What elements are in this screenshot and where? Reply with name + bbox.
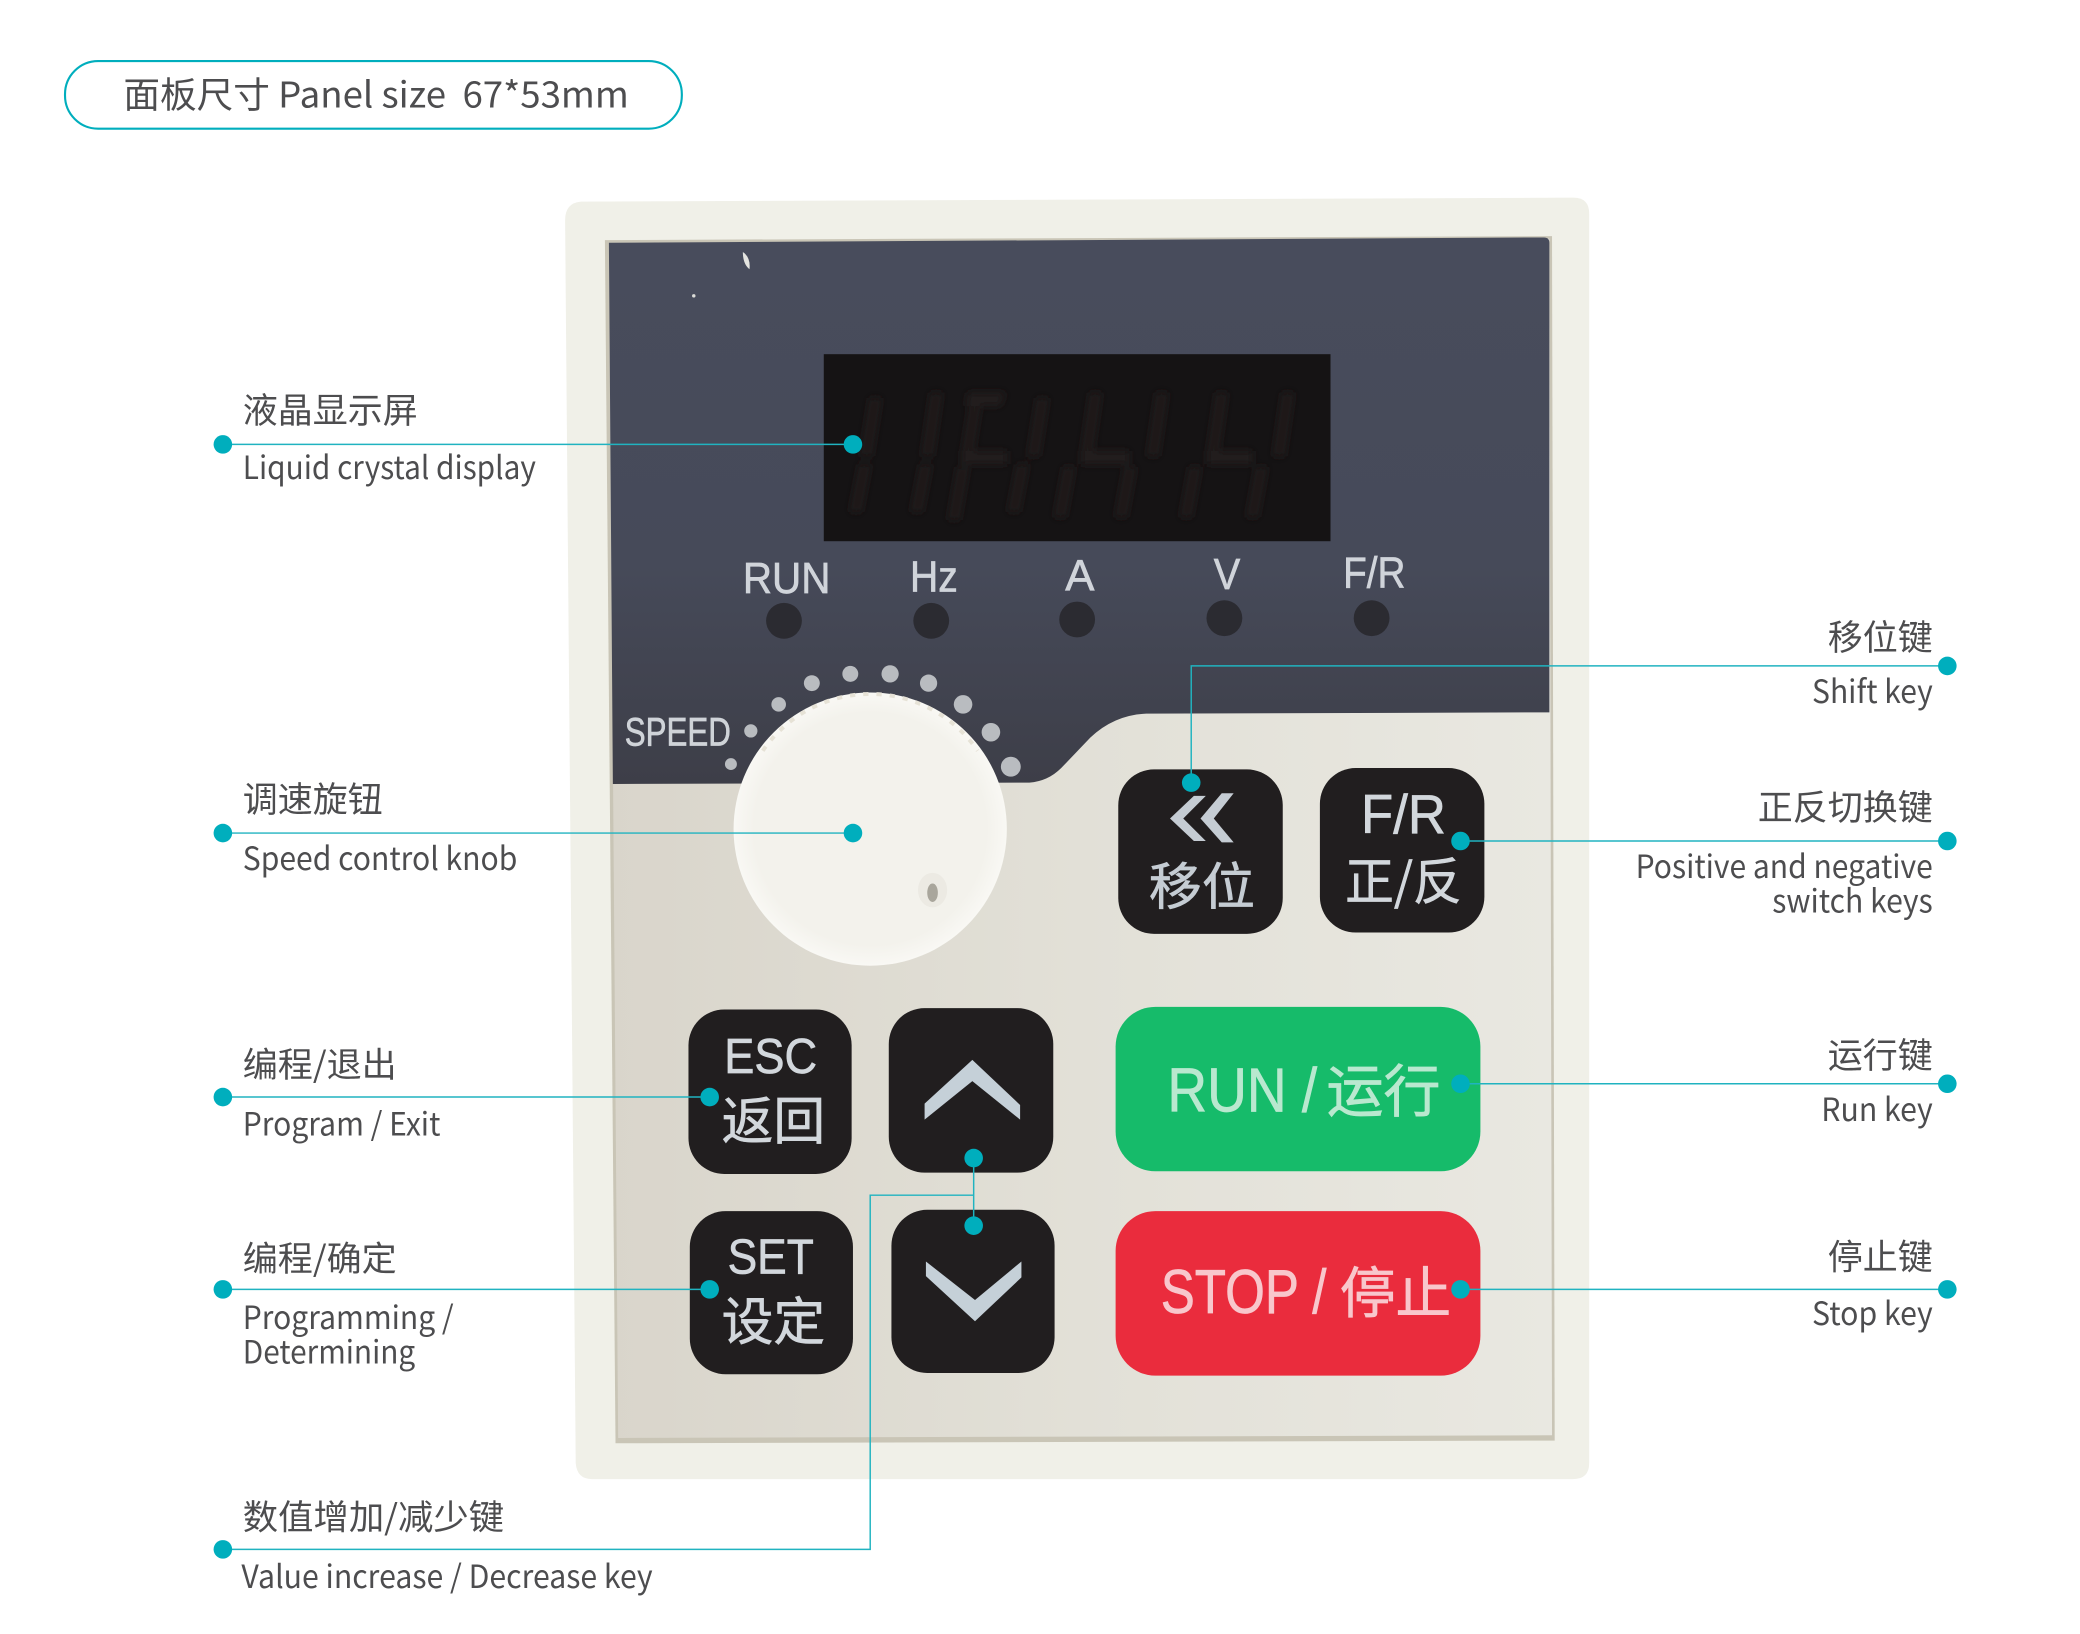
callout: speed control knob: 调速旋钮 [243,772,383,823]
key: STOP [1116,1211,1480,1376]
indicator LEDs [766,600,1390,639]
callout: liquid crystal display: 液晶显示屏 [243,383,418,434]
key: RUN [1116,1007,1480,1171]
callout: shift key [1182,610,1957,792]
callout: liquid crystal display: Liquid crystal display [243,443,536,489]
callout: speed control knob: Speed control knob [243,834,517,880]
key: ESC: ESC [724,1030,817,1084]
inner panel recess [605,236,1555,1443]
callout: shift key: 移位键 [1828,610,1933,661]
key: STOP: STOP / [1161,1258,1327,1327]
callout: programming determining: Determining [243,1328,415,1374]
key: RUN: RUN / [1167,1057,1318,1126]
outer plastic case [565,198,1589,1479]
callout: shift key: Shift key [1812,667,1933,713]
title pill [65,61,682,129]
speed scale dots [725,665,1021,777]
LED display window [824,354,1331,541]
title pill: 面板尺寸 Panel size 67*53mm [123,66,629,118]
callout: positive negative switch [1451,780,1957,923]
key: F/R [1320,768,1484,933]
dark display area [609,237,1549,784]
callout: run key: Run key [1821,1085,1933,1131]
callout: run key: 运行键 [1828,1028,1933,1079]
callout: positive negative switch: Positive and negative [1636,842,1933,888]
callout: value increase decrease: 数值增加/减少键 [243,1489,504,1539]
key: shift: 移位 [1149,847,1255,920]
callout: stop key [1451,1229,1957,1335]
key: ESC [688,1009,852,1174]
callout: positive negative switch: 正反切换键 [1758,780,1933,831]
panel light surface [609,239,1552,1438]
key: up [889,1008,1053,1173]
key: RUN: 运行 [1327,1047,1441,1129]
callout: stop key: 停止键 [1828,1229,1933,1280]
callout: speed control knob [214,772,862,880]
callout: program exit: Program / Exit [243,1099,440,1145]
callout: positive negative switch: switch keys [1772,877,1933,923]
key: SET [690,1211,853,1374]
callout: programming determining: 编程/确定 [243,1231,397,1281]
indicator labels [743,549,1405,603]
key: shift [1118,769,1283,934]
callout: program exit: 编程/退出 [243,1037,397,1087]
key: ESC: 返回 [722,1079,825,1154]
speed knob [734,692,1007,966]
callout: value increase decrease [214,1149,983,1598]
indicator labels: Hz [910,553,958,602]
callout: liquid crystal display [214,383,862,489]
device: control panel photo [565,198,1589,1479]
indicator labels: F/R [1343,549,1405,598]
callout: stop key: Stop key [1812,1289,1933,1335]
indicator labels: V [1214,550,1240,599]
callout: run key [1451,1028,1957,1131]
callout: value increase decrease: Value increase / Decrease key [241,1552,653,1598]
SPEED label: SPEED [625,711,731,755]
callout: programming determining [214,1231,719,1374]
key: SET: 设定 [722,1280,825,1355]
key: F/R: F/R [1361,784,1446,845]
key: F/R: 正/反 [1345,841,1462,914]
key: down [891,1210,1055,1373]
specks [743,252,750,269]
indicator labels: A [1065,551,1095,600]
callout: programming determining: Programming / [243,1293,454,1339]
key: SET: SET [728,1230,814,1284]
key: STOP: 停止 [1340,1249,1451,1330]
indicator labels: RUN [743,554,830,603]
callout: program exit [214,1037,719,1145]
